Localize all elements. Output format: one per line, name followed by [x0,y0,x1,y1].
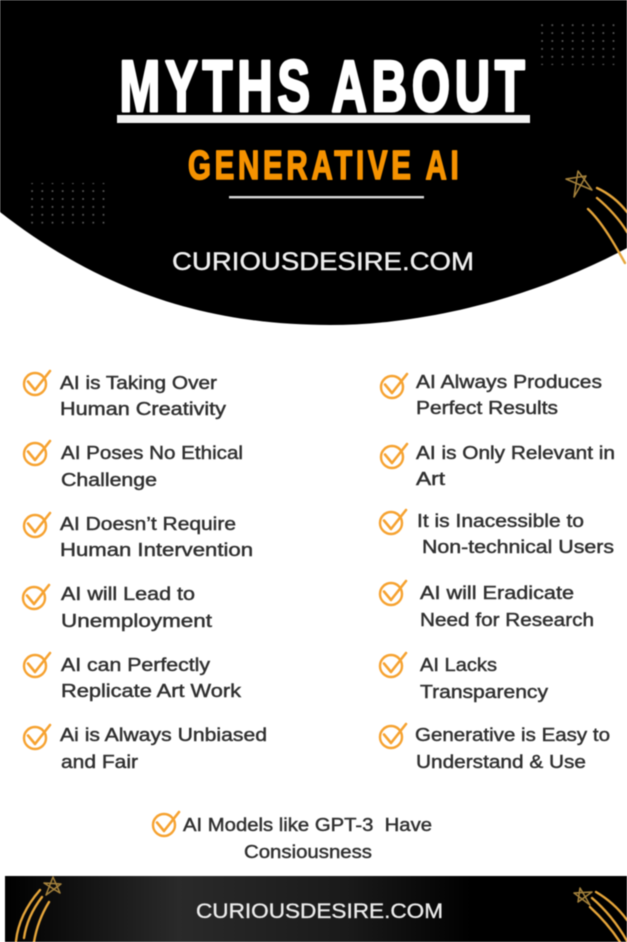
subtitle divider [229,196,424,198]
myth 9 [380,510,614,557]
dot pattern: top right [538,22,620,65]
myth 11: Transparency [420,681,549,702]
list: right column [380,371,615,772]
myth 1 [24,371,227,419]
myth 13: centered bottom item [153,812,432,862]
myth 3: AI Doesn’t Require [60,513,236,534]
myth 8: AI is Only Relevant in [416,442,615,463]
title underline [117,115,530,123]
myth 9: It is Inacessible to [417,510,584,531]
myth 8: Art [416,468,445,489]
myth 2: AI Poses No Ethical [61,442,243,463]
myth 5: AI can Perfectly [61,654,211,675]
myth 8 [381,442,615,489]
myth 6 [24,724,267,772]
myth 4: AI will Lead to [61,583,195,604]
myth 6: Ai is Always Unbiased [60,724,267,745]
myth 7: Perfect Results [416,397,558,418]
myth 4 [23,583,212,631]
icon: shooting star, header [566,171,627,263]
dot pattern: left [30,183,105,224]
myth 12: Generative is Easy to [415,724,610,745]
myth 7: AI Always Produces [416,371,602,392]
myth 3 [24,513,253,560]
myth 2: Challenge [61,469,157,490]
header website: CURIOUSDESIRE.COM [172,248,474,276]
myth 4: Unemployment [61,610,212,631]
list: left column [23,371,267,772]
myth 10 [380,581,594,630]
myth 1: AI is Taking Over [60,372,217,393]
header: black curved banner [0,0,627,325]
subtitle: GENERATIVE AI [188,142,459,188]
myth 2 [24,441,243,490]
myth 5 [24,653,242,701]
icon: shooting star, footer right [574,888,627,942]
myth 10: Need for Research [420,609,594,630]
myth 13: centered bottom item: Consiousness [244,841,372,862]
icon: shooting star, footer left [16,877,61,942]
myth 12: Understand & Use [416,751,586,772]
myth 1: Human Creativity [60,398,227,419]
footer website: CURIOUSDESIRE.COM [196,900,443,923]
myth 11: AI Lacks [420,654,497,675]
footer bar [5,876,627,942]
myth 11 [380,653,549,702]
myth 6: and Fair [61,751,138,772]
myth 5: Replicate Art Work [61,680,242,701]
title: MYTHS ABOUT [120,47,525,127]
myth 7 [381,371,602,418]
myth 10: AI will Eradicate [420,582,574,603]
myth 13: centered bottom item: AI Models like GPT-3 Have [183,814,432,835]
myth 3: Human Intervention [60,539,253,560]
myth 12 [380,724,610,772]
myth 9: Non-technical Users [422,536,614,557]
